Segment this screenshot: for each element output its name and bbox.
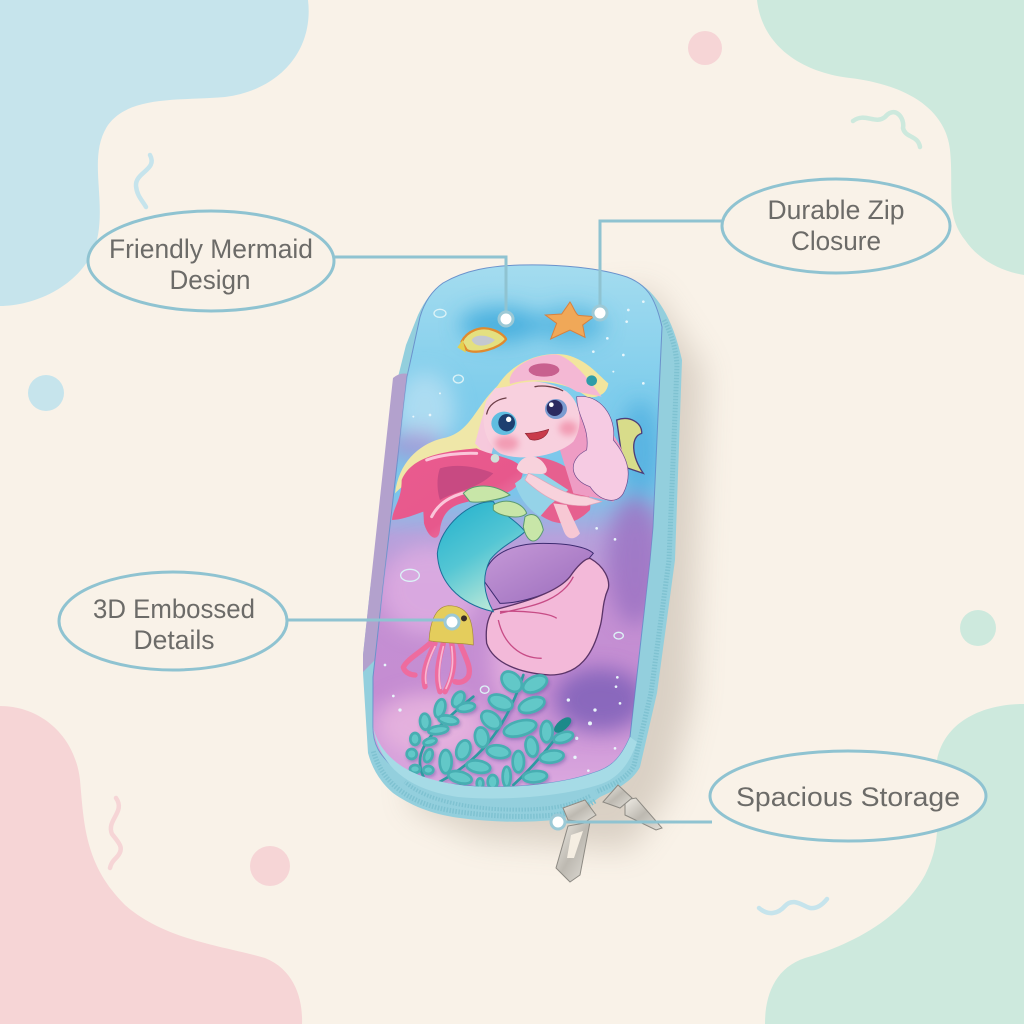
zipper body (363, 265, 682, 822)
blob: bottom left pink (0, 706, 302, 1024)
squiggle: pink bottom left (110, 798, 121, 868)
hair curl (586, 375, 597, 386)
callout: friendly mermaid design: Friendly Mermaid (109, 234, 313, 264)
case shadow (410, 290, 703, 850)
callout: 3d embossed details (59, 572, 287, 670)
callout: 3d embossed details: 3D Embossed (93, 594, 255, 624)
blob: bottom right green (765, 704, 1024, 1024)
seaweed (407, 668, 574, 788)
brows (487, 386, 563, 414)
hair back rainbow (617, 419, 643, 473)
face (483, 381, 580, 457)
hair parting (529, 363, 559, 377)
pale hair beside head (475, 413, 493, 454)
callout line: embossed details (287, 618, 452, 622)
jellyfish (403, 606, 473, 692)
panel artwork (375, 300, 663, 788)
fin creases (498, 577, 573, 658)
callout: friendly mermaid design (88, 211, 334, 311)
zipper pull: lower (556, 800, 596, 882)
fish (457, 328, 506, 353)
zipper teeth (373, 320, 677, 816)
mermaid tail (437, 502, 525, 612)
dot: pink bottom left (250, 846, 290, 886)
green waist fins (463, 486, 543, 541)
dot: green right (960, 610, 996, 646)
mouth (525, 429, 549, 440)
tail fin (486, 558, 609, 675)
starfish (545, 302, 594, 339)
callout: durable zip closure (722, 179, 950, 273)
callout: friendly mermaid design: Design (170, 265, 250, 295)
callout: spacious storage: Spacious Storage (736, 782, 960, 812)
left pink hair (392, 448, 523, 538)
marker: embossed details (445, 615, 459, 629)
callout: durable zip closure: Durable Zip (768, 195, 904, 225)
bubbles (401, 309, 623, 693)
squiggle: blue top left (136, 155, 152, 207)
marker: mermaid design (499, 312, 513, 326)
sparkles (384, 300, 645, 772)
tail dark body (483, 543, 593, 603)
squiggle: green top right (853, 112, 920, 147)
seam band (373, 727, 637, 798)
ear and earring (491, 454, 499, 463)
hair magenta fold (437, 466, 493, 500)
blob: top left blue (0, 0, 309, 306)
product: mermaid pencil case (363, 265, 703, 882)
left eye (491, 412, 517, 435)
left yellow hair (395, 385, 498, 493)
dress (515, 474, 568, 516)
dot: pink top (688, 31, 722, 65)
callout: spacious storage (710, 751, 986, 841)
dot: blue left (28, 375, 64, 411)
right back hair (560, 412, 623, 502)
hair behind body (537, 457, 590, 523)
right pale hair (573, 396, 628, 500)
squiggle: blue bottom right (759, 899, 827, 913)
zipper pull: upper (603, 785, 662, 830)
case front panel (373, 265, 662, 787)
illustration traced at 3x (384, 300, 645, 788)
lower arm (553, 503, 580, 538)
hair highlight (427, 453, 477, 517)
callout line: zip closure (600, 221, 722, 313)
cheeks (495, 421, 578, 451)
side strap (363, 374, 408, 672)
callout: 3d embossed details: Details (134, 625, 214, 655)
hair crown (496, 354, 608, 397)
marker: storage (551, 815, 565, 829)
neck and torso (517, 456, 547, 474)
callout: durable zip closure: Closure (791, 226, 881, 256)
shading (375, 307, 663, 757)
right eye (545, 399, 567, 419)
arm (525, 473, 602, 506)
blob: top right green (757, 0, 1024, 275)
callout line: storage (558, 820, 712, 824)
callout line: mermaid design (334, 257, 506, 319)
marker: zip closure (593, 306, 607, 320)
